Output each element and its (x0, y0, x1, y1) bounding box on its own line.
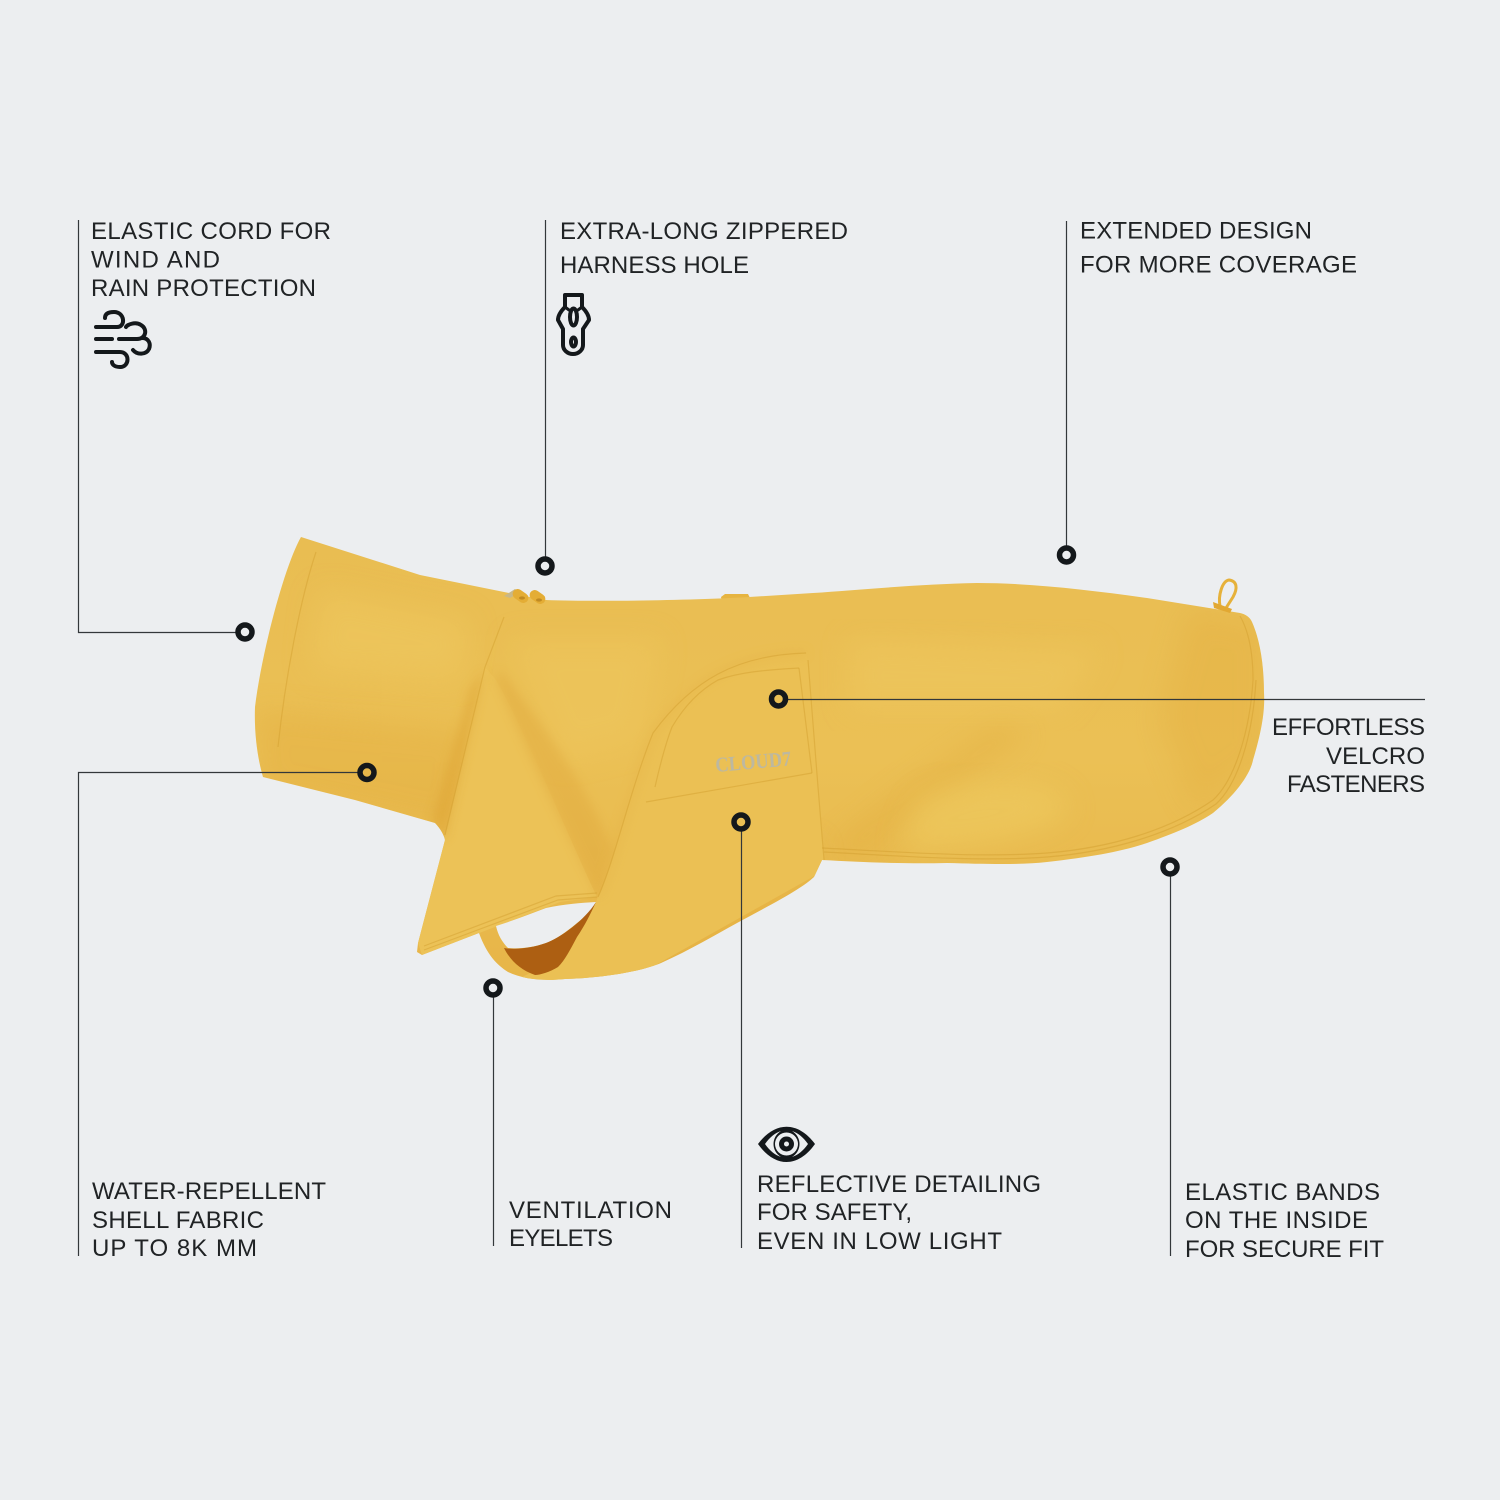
icon: elastic cord toggle (1213, 602, 1232, 613)
callout text: reflective detailing: EVEN IN LOW LIGHT (757, 1228, 1002, 1255)
callout: ventilation eyelets (486, 981, 672, 1252)
callout text: elastic bands: ON THE INSIDE (1185, 1207, 1368, 1234)
callout text: elastic bands: ELASTIC BANDS (1185, 1179, 1380, 1206)
icon: zipper (558, 295, 589, 354)
callout text: elastic cord: WIND AND (91, 246, 220, 274)
callout text: zippered harness hole (560, 218, 848, 279)
callout text: elastic cord (91, 218, 331, 302)
icon: velcro tab on back (721, 594, 750, 602)
callout text: extended design: EXTENDED DESIGN (1080, 218, 1312, 244)
coat shading (255, 590, 1265, 985)
callout text: velcro fasteners: EFFORTLESS (1272, 714, 1425, 741)
callout: elastic bands (1163, 860, 1384, 1263)
callout text: velcro fasteners: VELCRO (1326, 743, 1425, 770)
callout: water-repellent fabric (78, 766, 374, 1262)
callout text: ventilation eyelets: EYELETS (509, 1225, 613, 1252)
left leg flap (418, 763, 596, 955)
callout text: extended design (1080, 218, 1357, 278)
callout text: ventilation eyelets (509, 1197, 672, 1252)
callout text: zippered harness hole: EXTRA-LONG ZIPPERED (560, 218, 848, 245)
icon: zipper pulls (504, 587, 547, 606)
callout text: water-repellent fabric (92, 1178, 326, 1262)
stitching (278, 552, 1256, 950)
callout text: velcro fasteners: FASTENERS (1287, 771, 1425, 798)
callout: velcro fasteners (772, 692, 1425, 798)
icon: elastic cord loop (1219, 580, 1236, 608)
callout text: reflective detailing (757, 1171, 1041, 1255)
callout text: ventilation eyelets: VENTILATION (509, 1197, 672, 1224)
orange coat lining (504, 902, 596, 975)
hood-to-leg shadow (432, 684, 480, 835)
callout text: extended design: FOR MORE COVERAGE (1080, 252, 1357, 278)
callout text: velcro fasteners (1272, 714, 1425, 798)
callout text: reflective detailing: REFLECTIVE DETAILING (757, 1171, 1041, 1198)
callout: elastic cord (78, 218, 331, 639)
callout text: water-repellent fabric: UP TO 8K MM (92, 1235, 257, 1262)
callout: reflective detailing (734, 815, 1041, 1255)
callout text: elastic bands: FOR SECURE FIT (1185, 1236, 1384, 1263)
callout: zippered harness hole (538, 218, 848, 573)
icon: wind (96, 312, 150, 367)
icon: eye (758, 1127, 815, 1162)
callout: extended design (1060, 218, 1357, 562)
callout text: reflective detailing: FOR SAFETY, (757, 1199, 912, 1226)
callout text: zippered harness hole: HARNESS HOLE (560, 252, 749, 279)
yellow dog raincoat (255, 537, 1265, 985)
callout text: elastic cord: ELASTIC CORD FOR (91, 218, 331, 245)
callout text: water-repellent fabric: SHELL FABRIC (92, 1207, 264, 1234)
fold shadow (504, 684, 604, 872)
coat body (255, 537, 1264, 980)
leg opening (496, 902, 596, 948)
callout text: water-repellent fabric: WATER-REPELLENT (92, 1178, 326, 1205)
callout text: elastic cord: RAIN PROTECTION (91, 275, 316, 302)
chest strap (522, 842, 824, 980)
reflective logo: CLOUD7 (714, 746, 792, 777)
callout text: elastic bands (1185, 1179, 1384, 1263)
